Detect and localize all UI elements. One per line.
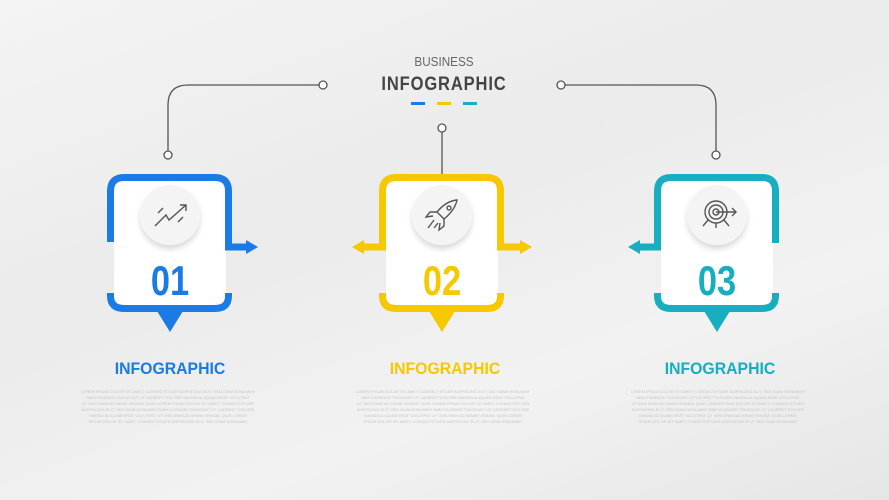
panel: step 02 <box>352 178 532 332</box>
text block: step 01 <box>81 389 256 424</box>
title: INFOGRAPHIC <box>381 73 507 94</box>
panel: step 03: 03 <box>698 258 736 305</box>
text block: step 01: ADIPISCING ELIT, SED DIAM NONUMMY NIBH EUISMOD TINCIDUNT UT LAOREET DOLORE <box>82 407 255 412</box>
connector right <box>557 81 720 159</box>
text block: step 01: IPSUM DOLOR SIT AMET, CONSECTETUER ADIPISCING ELIT, SED DIAM NONUMMY <box>88 419 248 424</box>
text block: step 01: NIBH EUISMOD TINCIDUNT UT LAOREET DOLORE MAGNA ALIQUAM ERAT VOLUTPAT <box>86 395 250 400</box>
text block: step 03 <box>631 389 806 424</box>
text block: step 01: MAGNA ALIQUAM ERAT VOLUTPAT. UT WISI ENIM AD MINIM VENIAM, QUIS LOREM <box>89 413 247 418</box>
text block: step 02: UT WISI ENIM AD MINIM VENIAM, QUIS LOREM IPSUM DOLOR SIT AMET, CONSECTETUER <box>357 401 529 406</box>
title <box>381 54 507 105</box>
text block: step 02: ADIPISCING ELIT, SED DIAM NONUMMY NIBH EUISMOD TINCIDUNT UT LAOREET DOLORE <box>356 407 530 412</box>
text block: step 02 <box>356 389 531 424</box>
text block: step 02: NIBH EUISMOD TINCIDUNT UT LAOREET DOLORE MAGNA ALIQUAM ERAT VOLUTPAT <box>361 395 525 400</box>
connector center <box>438 124 446 174</box>
text block: step 03: NIBH EUISMOD TINCIDUNT UT LAOREET DOLORE MAGNA ALIQUAM ERAT VOLUTPAT <box>636 395 800 400</box>
text block: step 03: IPSUM DOLOR SIT AMET, CONSECTETUER ADIPISCING ELIT, SED DIAM NONUMMY <box>638 419 798 424</box>
connector left <box>164 81 327 159</box>
icon: trend arrow <box>155 205 186 226</box>
text block: step 02: LOREM IPSUM DOLOR SIT AMET, CONSECTETUER ADIPISCING ELIT, SED DIAM NONUMMY <box>356 389 531 394</box>
heading: step 01: INFOGRAPHIC <box>115 360 225 378</box>
text block: step 01: UT WISI ENIM AD MINIM VENIAM, QUIS LOREM IPSUM DOLOR SIT AMET, CONSECTETUER <box>82 401 254 406</box>
text block: step 03: LOREM IPSUM DOLOR SIT AMET, CONSECTETUER ADIPISCING ELIT, SED DIAM NONUMMY <box>631 389 806 394</box>
panel: step 01: 01 <box>151 258 189 305</box>
text block: step 03: UT WISI ENIM AD MINIM VENIAM, QUIS LOREM IPSUM DOLOR SIT AMET, CONSECTETUER <box>632 401 804 406</box>
text block: step 02: MAGNA ALIQUAM ERAT VOLUTPAT. UT WISI ENIM AD MINIM VENIAM, QUIS LOREM <box>364 413 522 418</box>
heading: step 02: INFOGRAPHIC <box>390 360 500 378</box>
panel: step 01 <box>110 178 258 332</box>
heading: step 03: INFOGRAPHIC <box>665 360 775 378</box>
text block: step 03: MAGNA ALIQUAM ERAT VOLUTPAT. UT WISI ENIM AD MINIM VENIAM, QUIS LOREM <box>639 413 797 418</box>
icon: rocket <box>426 200 457 230</box>
icon: target <box>703 201 736 228</box>
panel: step 03 <box>628 178 776 332</box>
panel: step 02: 02 <box>423 258 461 305</box>
text block: step 03: ADIPISCING ELIT, SED DIAM NONUMMY NIBH EUISMOD TINCIDUNT UT LAOREET DOLORE <box>632 407 805 412</box>
text block: step 02: IPSUM DOLOR SIT AMET, CONSECTETUER ADIPISCING ELIT, SED DIAM NONUMMY <box>363 419 523 424</box>
text block: step 01: LOREM IPSUM DOLOR SIT AMET, CONSECTETUER ADIPISCING ELIT, SED DIAM NONUMMY <box>81 389 256 394</box>
title: BUSINESS <box>414 54 474 69</box>
